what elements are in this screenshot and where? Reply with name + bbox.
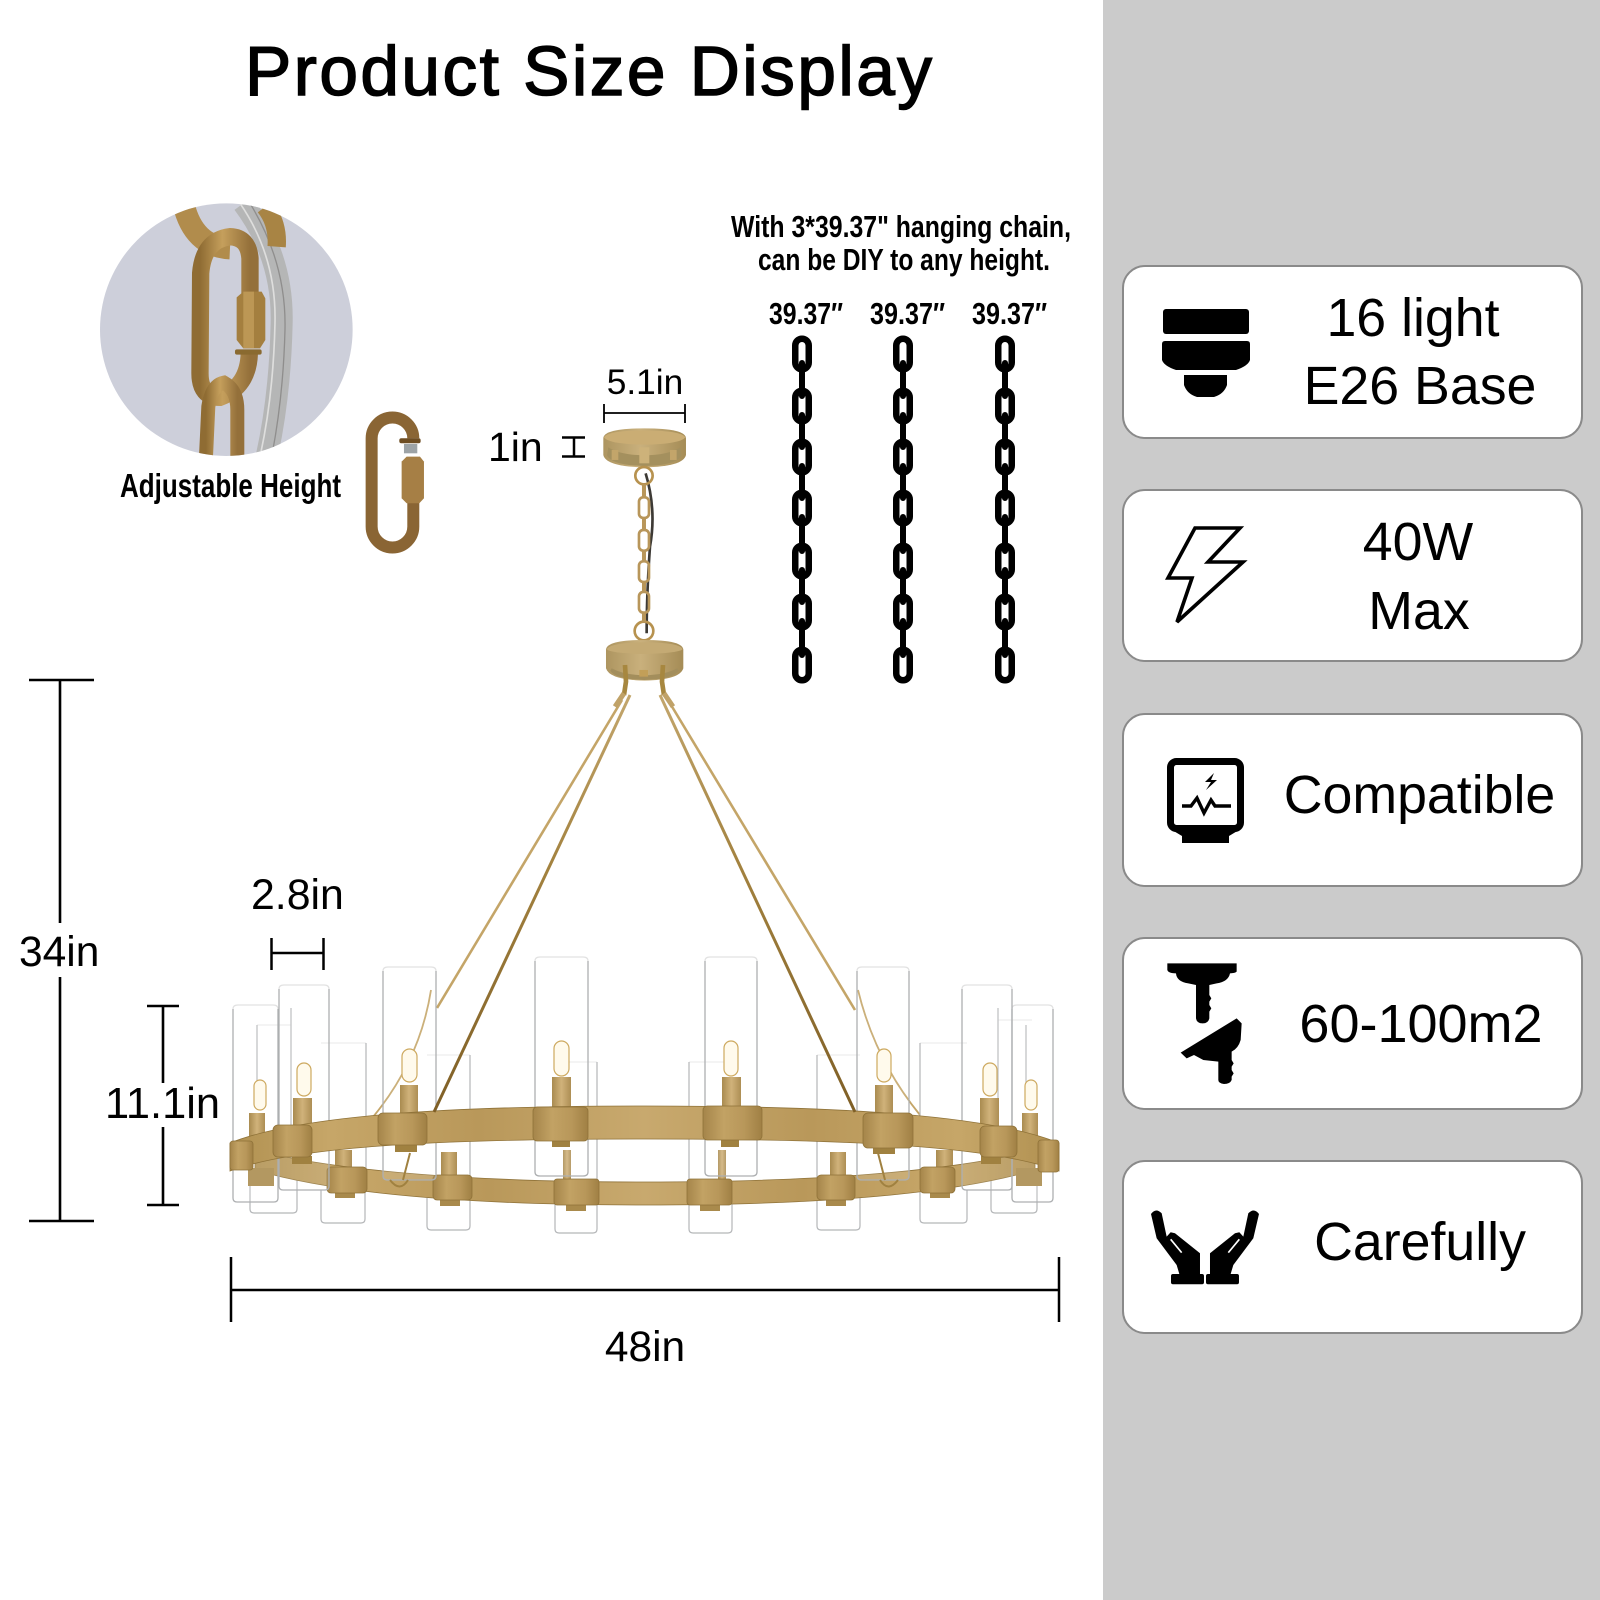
card: 40W max	[1123, 490, 1582, 661]
chain length labels: 39.37″	[972, 296, 1047, 331]
bulbs	[254, 1041, 1037, 1110]
gold chain	[635, 467, 653, 640]
dimension: 1in	[488, 424, 585, 470]
lower ring hubs and caps	[248, 1167, 1042, 1211]
chain detail circle photo	[100, 203, 353, 457]
card: carefully	[1123, 1161, 1582, 1333]
right grey panel	[1103, 0, 1600, 1600]
upper ring band	[230, 1106, 1059, 1171]
card: 16 light E26 base: 16 light	[1326, 288, 1500, 348]
loose quick link carabiner	[372, 417, 424, 547]
card: 60-100m2	[1123, 938, 1582, 1109]
card: compatible: Compatible	[1284, 765, 1555, 825]
dimension: 11.1in	[105, 1006, 220, 1205]
card: 60-100m2: 60-100m2	[1299, 994, 1543, 1054]
dimension: 11.1in: 11.1in	[105, 1080, 220, 1128]
chain note: can be DIY to any height.	[758, 242, 1050, 277]
icon: dimmer monitor	[1170, 762, 1240, 843]
lower candle sockets	[335, 1150, 953, 1180]
chain length labels	[769, 296, 1047, 331]
lower ring band	[255, 1150, 1035, 1205]
chain note	[731, 209, 1071, 277]
dimension: 48in: 48in	[605, 1324, 685, 1371]
black chain 2	[896, 339, 910, 680]
icon: bulb base	[1162, 309, 1250, 397]
black chain 1	[795, 339, 809, 680]
card: 40W max: 40W	[1363, 512, 1474, 572]
chain length labels: 39.37″	[870, 296, 945, 331]
title: Product Size Display	[245, 32, 932, 110]
upper glass shades	[233, 957, 1053, 1202]
dimension: 5.1in	[604, 363, 685, 423]
dimension: 34in	[19, 680, 99, 1221]
icon: lightning bolt	[1168, 528, 1243, 622]
dimension: 48in	[231, 1257, 1059, 1371]
adjustable height label: Adjustable Height	[120, 467, 341, 504]
chandelier	[230, 428, 1059, 1233]
card: carefully: Carefully	[1314, 1212, 1526, 1272]
lower hub	[606, 640, 683, 707]
ceiling canopy	[603, 428, 686, 467]
card: 16 light E26 base: E26 Base	[1304, 356, 1536, 416]
back support rods	[373, 700, 920, 1117]
card: compatible	[1123, 714, 1582, 886]
dimension: 34in: 34in	[19, 929, 99, 976]
lower glass shades	[250, 1008, 1037, 1233]
upper candle sockets	[249, 1077, 1038, 1143]
front support rods	[434, 695, 855, 1112]
dimension: 2.8in: 2.8in	[251, 871, 344, 919]
upper ring hubs and caps	[230, 1106, 1059, 1186]
dimension: 5.1in: 5.1in	[607, 363, 683, 402]
icon: caring hands	[1151, 1210, 1259, 1284]
dimension: 2.8in	[251, 871, 344, 970]
chain note: With 3*39.37" hanging chain,	[731, 209, 1071, 244]
card: 16 light E26 base	[1123, 266, 1582, 438]
chain length labels: 39.37″	[769, 296, 843, 331]
hanging hardware: canopy, chain, hub	[603, 428, 686, 707]
card: 40W max: Max	[1368, 581, 1470, 641]
dimension: 1in: 1in	[488, 424, 543, 470]
icon: ceiling and slope mount	[1167, 963, 1242, 1084]
black chain 3	[998, 339, 1012, 680]
